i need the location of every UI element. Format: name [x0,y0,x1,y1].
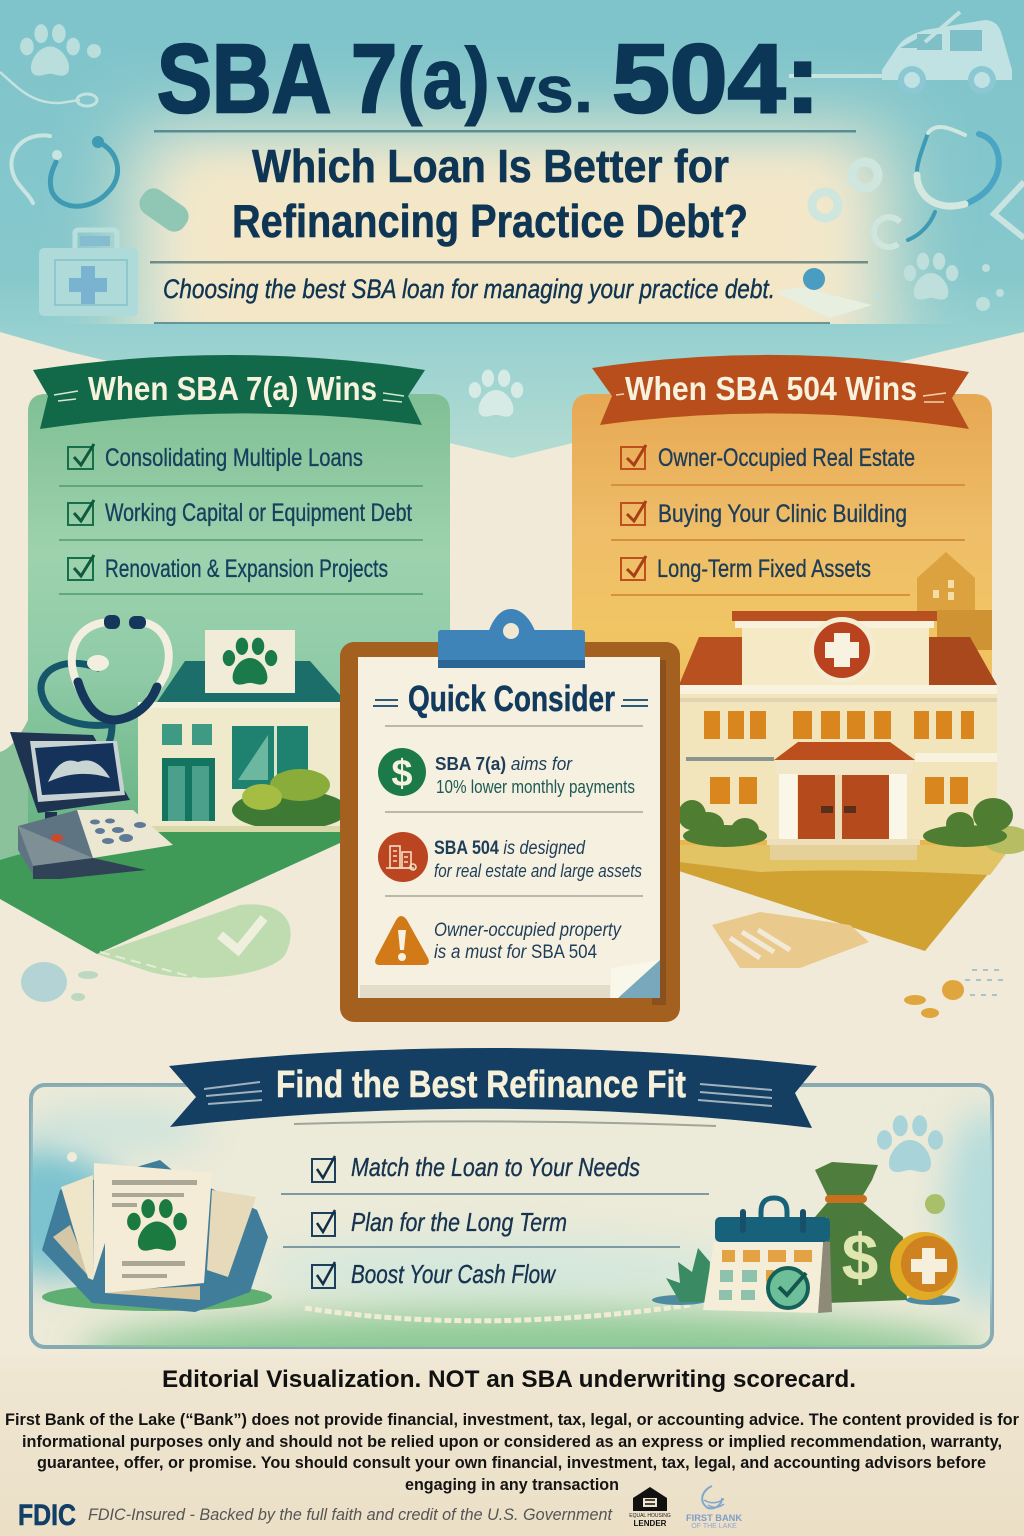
lawn [132,826,340,832]
icon: right stethoscope [908,127,999,240]
checklist: orange [611,444,965,595]
footer headline: Editorial Visualization. NOT an SBA underwriting scorecard. [162,1366,856,1393]
page curl [611,960,660,998]
banner: when SBA 504 wins: When SBA 504 Wins [625,370,917,407]
item: 7(a) payments: $ [391,753,413,795]
item: 504 real estate [378,832,642,882]
right roof [929,637,997,685]
door [162,758,215,821]
icon: stethoscope [41,615,169,745]
icon: note card and pin [775,268,872,318]
title: (a) [397,31,490,127]
icon: faint paw behind panels [469,370,523,417]
hero decorative icons [0,12,1024,318]
faint blue paw smudge [21,962,98,1002]
portico [767,742,920,860]
icon: ultrasound machine [10,732,173,879]
icon: pill [135,184,193,236]
panel: quick consider clipboard [340,609,680,1022]
sign with paw [205,630,295,693]
icon: documents with paw [42,1160,272,1312]
tagline: Choosing the best SBA loan for managing your practice debt. [163,274,775,304]
icon: van [789,12,1012,94]
FDIC statement: FDIC-Insured - Backed by the full faith and credit of the U.S. Government [88,1506,613,1524]
item: 504 real estate: SBA 504 is designed [434,838,586,859]
title rule bottom [154,322,830,324]
heading: Quick Consider [408,678,615,719]
item: owner occupied: is a must for SBA 504 [434,942,597,963]
icon: money bag [815,1162,960,1305]
panel washes [0,1105,1024,1394]
icon: paw right [877,1115,943,1172]
dashed path [305,1305,690,1321]
decorative dots [67,1152,945,1214]
icon: left stethoscope [11,135,118,206]
board [340,642,680,1022]
bush [232,769,348,830]
check item 1: Consolidating Multiple Loans [105,444,363,472]
upper windows [704,711,974,739]
check item 3 [68,555,388,583]
cornice [735,620,934,628]
subtitle [232,140,748,247]
banner: find the best refinance fit: Find the Best Refinance Fit [276,1064,686,1106]
footprint dots [904,970,1005,1018]
illustration: vet clinic [132,630,348,832]
grass: left [0,829,340,954]
FDIC logo: FDIC [18,1499,76,1532]
check item 3: Long-Term Fixed Assets [657,555,871,583]
item: 7(a) payments [378,748,635,797]
check item 3: Renovation & Expansion Projects [105,555,388,583]
icon: pill rings [812,162,900,247]
item: 7(a) payments: SBA 7(a) aims for [435,753,573,774]
subtitle: Which Loan Is Better for [252,140,729,192]
title: 504: [612,24,820,133]
icon: equal housing lender: EQUAL HOUSING [629,1513,671,1519]
item: owner occupied [375,916,622,965]
clip [438,609,585,668]
ghost check blob [97,904,291,990]
medical cross emblem [809,617,875,683]
item: owner occupied: Owner-occupied property [434,920,622,941]
checklist: green [59,444,423,594]
check item 2: Plan for the Long Term [351,1207,567,1237]
logo: First Bank of the Lake: OF THE LAKE [691,1523,737,1530]
subtitle: Refinancing Practice Debt? [232,195,748,247]
panel: when SBA 7(a) wins [0,394,450,1002]
title rule middle [150,261,868,264]
ghost tag shape [712,912,869,968]
string course [686,757,774,761]
logo: First Bank of the Lake [686,1486,743,1530]
rule under banner [294,1121,716,1126]
checklist: navy [281,1152,709,1289]
disclaimer: guarantee, offer, or promise. You should consult your own financial, investment, tax, legal, and accounting advisors before [37,1454,986,1472]
item: 7(a) payments: 10% lower monthly payments [436,777,635,797]
icon: paw lower right [875,253,1004,311]
icon: plant [652,1248,710,1305]
disclaimer: First Bank of the Lake (“Bank”) does not provide financial, investment, tax, legal, or accounting advice. The content provided is for [5,1411,1020,1429]
panel: find the best refinance fit [29,1083,994,1349]
icon: equal housing lender [629,1487,671,1528]
banner: when SBA 7(a) wins: When SBA 7(a) Wins [88,370,377,407]
hero teal band [0,0,1024,458]
walls [138,706,340,826]
icon: small background house [917,552,992,650]
centre block [742,626,929,685]
icon: stethoscope line top left [0,72,97,106]
icon: coin with plus [890,1232,958,1300]
title: vs. [497,52,593,126]
wall [679,685,997,840]
check item 3 [312,1259,557,1289]
illustration: clinic building [678,611,1013,860]
disclaimer: engaging in any transaction [405,1476,619,1494]
banner: find the best refinance fit [169,1048,817,1128]
panel: when SBA 504 wins [572,394,1024,1018]
item: 504 real estate: for real estate and large assets [434,861,642,881]
left roof [679,637,759,685]
icon: calendar [703,1198,832,1313]
title [157,24,820,133]
banner: when SBA 504 wins [592,355,969,429]
icon: diamond frame [994,182,1024,238]
roof [157,661,340,702]
windows [162,724,308,789]
title rule top [154,130,856,132]
check item 2: Buying Your Clinic Building [658,500,907,528]
disclaimer [5,1411,1020,1494]
bushes [678,798,1013,847]
paper [358,657,660,998]
disclaimer: informational purposes only and should not be relied upon or considered as an express or implied recommendation, warranty, [22,1433,1002,1451]
grass: right [679,826,1024,951]
icon: paw top left [20,24,101,76]
lower windows [710,777,968,804]
check item 1: Owner-Occupied Real Estate [658,444,915,472]
icon: equal housing lender: LENDER [634,1519,667,1528]
check item 3: Boost Your Cash Flow [351,1259,557,1289]
logo: First Bank of the Lake: FIRST BANK [686,1513,743,1523]
title: SBA 7 [157,24,397,133]
white band [679,685,997,694]
icon: money bag: $ [842,1220,878,1294]
check item 1: Match the Loan to Your Needs [351,1152,640,1182]
check item 2: Working Capital or Equipment Debt [105,499,412,527]
icon: first aid kit [39,230,138,316]
banner: when SBA 7(a) wins [33,355,425,429]
footer paper tone [0,1350,1024,1536]
